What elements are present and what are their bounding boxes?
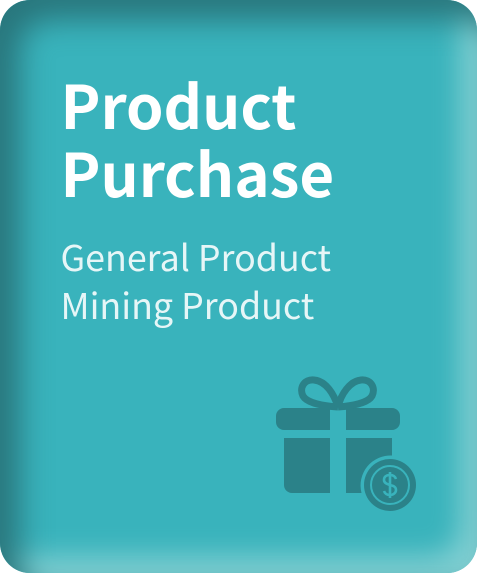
title: Product [60,60,297,147]
subtitle list [60,230,331,330]
title: Purchase [60,128,334,215]
subtitle list: General Product [60,230,331,282]
title [60,60,334,215]
subtitle list: Mining Product [60,278,314,330]
icon: gift box with dollar coin [276,376,416,511]
